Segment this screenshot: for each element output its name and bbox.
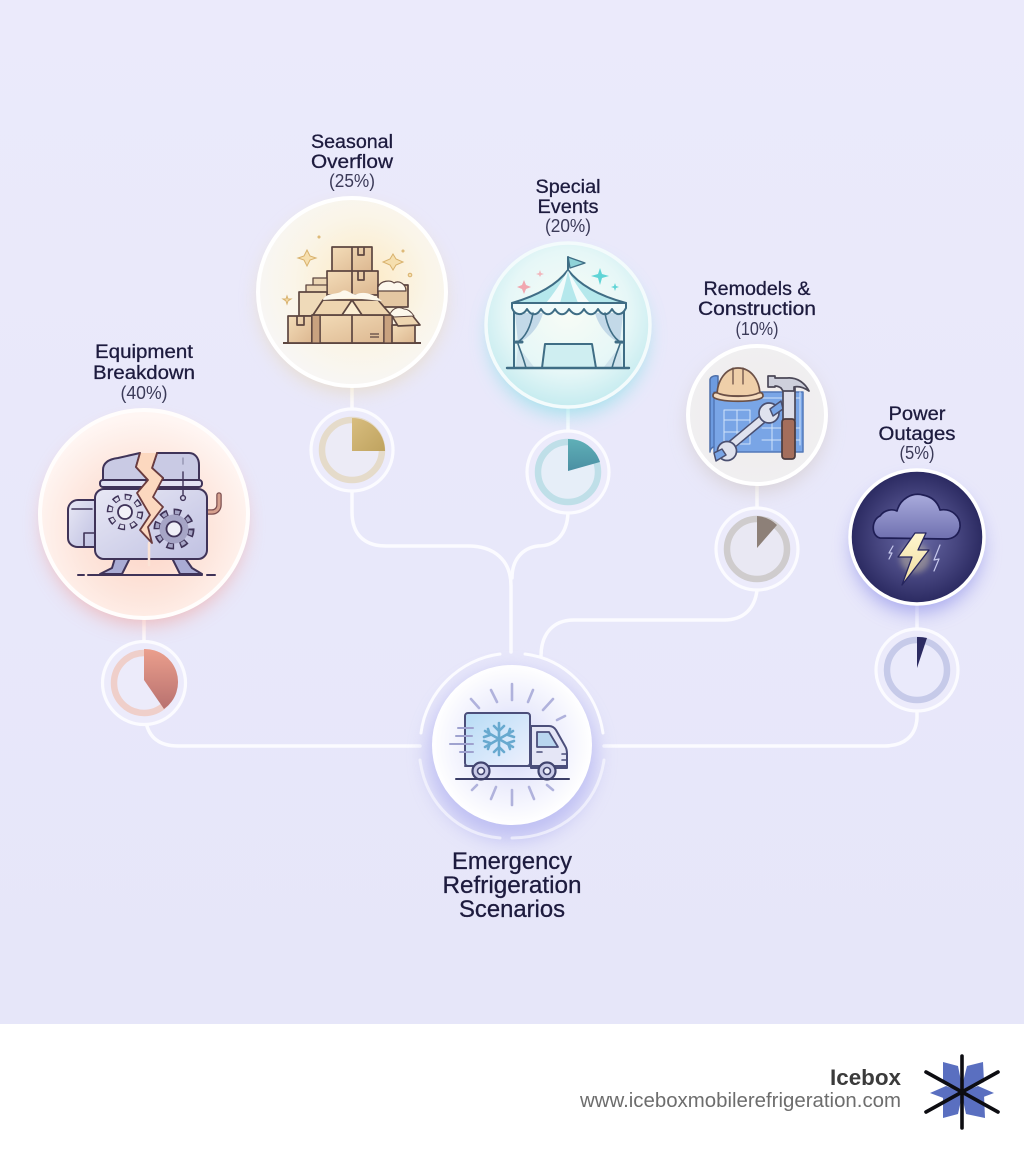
node: special events bbox=[486, 176, 650, 513]
label: power outages: (5%) bbox=[900, 443, 934, 463]
brand text: www.iceboxmobilerefrigeration.com bbox=[579, 1090, 901, 1112]
icon: right gear bbox=[157, 512, 191, 546]
node: remodels and construction bbox=[688, 278, 826, 590]
icon: storm cloud bbox=[873, 494, 960, 585]
label: remodels and construction bbox=[698, 278, 816, 339]
icon: hammer bbox=[768, 376, 809, 459]
logo bbox=[926, 1056, 998, 1128]
icon: refrigerated truck bbox=[450, 684, 569, 805]
outer arcs bbox=[420, 654, 604, 838]
title: Refrigeration bbox=[442, 872, 582, 899]
icon: cardboard boxes bbox=[283, 247, 421, 343]
label: seasonal overflow: (25%) bbox=[329, 171, 375, 191]
label: power outages bbox=[878, 403, 956, 463]
donut: 5% bbox=[876, 629, 958, 711]
label: seasonal overflow: Seasonal bbox=[311, 131, 393, 153]
sparkles bbox=[283, 236, 412, 304]
donut: 40% bbox=[102, 642, 186, 724]
label: equipment breakdown: Equipment bbox=[95, 341, 194, 363]
icon: left gear bbox=[110, 497, 140, 527]
icon: wrench bbox=[714, 401, 783, 461]
title: Scenarios bbox=[459, 896, 565, 923]
label: remodels and construction: Remodels & bbox=[704, 278, 810, 300]
label: equipment breakdown: (40%) bbox=[120, 383, 168, 403]
brand text bbox=[579, 1065, 902, 1112]
donut: 20% bbox=[527, 431, 609, 513]
label: seasonal overflow: Overflow bbox=[311, 151, 394, 173]
label: special events: Events bbox=[538, 196, 599, 218]
label: power outages: Power bbox=[888, 403, 946, 425]
label: remodels and construction: Construction bbox=[698, 298, 816, 320]
donut: 25% bbox=[311, 409, 393, 491]
label: remodels and construction: (10%) bbox=[736, 319, 778, 339]
node: power outages bbox=[850, 403, 984, 711]
label: power outages: Outages bbox=[878, 423, 956, 445]
label: equipment breakdown bbox=[93, 341, 195, 403]
node: seasonal overflow bbox=[258, 131, 446, 491]
label: special events: Special bbox=[536, 176, 600, 198]
footer bbox=[0, 1024, 1024, 1154]
label: equipment breakdown: Breakdown bbox=[93, 362, 195, 384]
label: special events bbox=[536, 176, 600, 236]
sparkles bbox=[517, 268, 619, 294]
title bbox=[442, 848, 582, 923]
brand text: Icebox bbox=[830, 1065, 902, 1090]
connector lines bbox=[144, 388, 917, 746]
label: special events: (20%) bbox=[545, 216, 591, 236]
title: Emergency bbox=[452, 848, 572, 875]
icon: event tent bbox=[507, 257, 629, 368]
center hub: emergency refrigeration bbox=[420, 654, 604, 923]
icon: snowflake bbox=[484, 723, 514, 755]
donut: 10% bbox=[716, 508, 798, 590]
label: seasonal overflow bbox=[311, 131, 394, 191]
icon: broken compressor bbox=[68, 453, 219, 575]
node: equipment breakdown bbox=[40, 341, 248, 724]
icon: blueprint and tools bbox=[710, 368, 809, 461]
